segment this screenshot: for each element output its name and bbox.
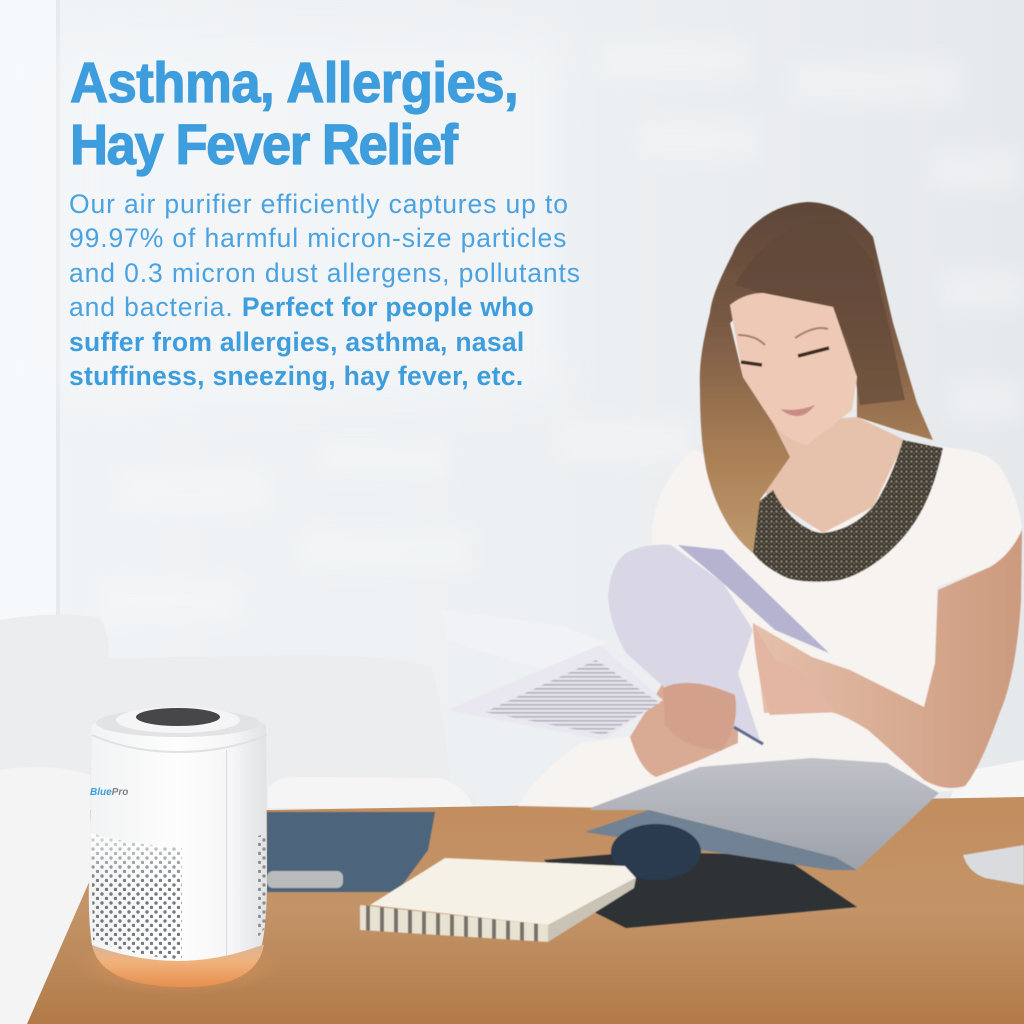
body text: 99.97% of harmful micron-size particles [69,223,567,253]
filter holes [91,833,182,960]
title [70,51,518,177]
title: Hay Fever Relief [70,113,457,177]
folder [585,810,857,870]
title: Asthma, Allergies, [70,51,518,115]
body text: and bacteria. Perfect for people who [69,292,534,322]
face [730,293,857,445]
logo: BluePro [90,787,128,798]
body text: suffer from allergies, asthma, nasal [69,327,525,357]
mouse [611,824,701,880]
right arm [753,530,1022,788]
body text: Our air purifier efficiently captures up to [69,188,569,218]
magazine in hands [440,545,835,750]
mouse pad [544,852,857,928]
body text [69,188,581,391]
hair [700,202,933,553]
notebook [370,858,636,925]
chest [740,417,905,533]
sofa [0,614,1024,1024]
necklace collar [737,440,943,582]
folder and desk items [267,758,1024,942]
soft white glow behind text [50,40,560,400]
woman [518,202,1022,810]
air purifier [73,707,283,995]
table [27,797,1024,1024]
laptop [963,845,1024,885]
clipboard [267,812,435,892]
left arm [630,683,738,777]
blouse [518,440,1022,810]
body text: stuffiness, sneezing, hay fever, etc. [69,361,523,391]
body text: and 0.3 micron dust allergens, pollutants [69,258,581,288]
